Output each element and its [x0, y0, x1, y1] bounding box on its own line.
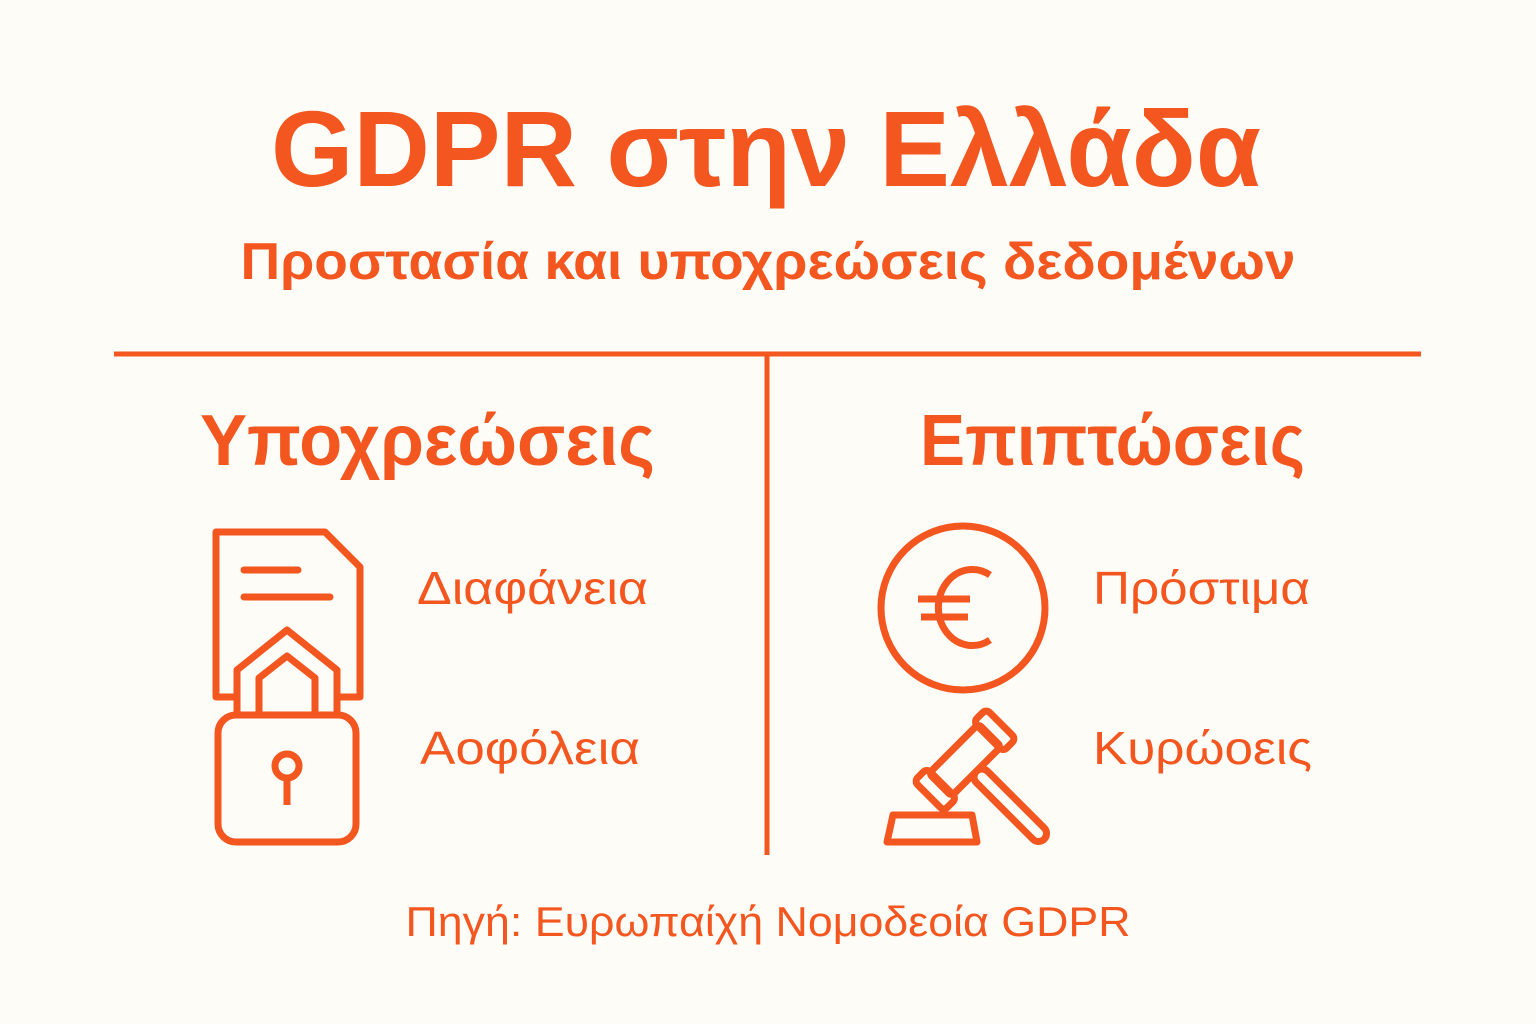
label: security: Αοφόλεια	[420, 722, 640, 774]
heading: consequences: Επιπτώσεις	[920, 401, 1305, 481]
icon: lock	[218, 630, 356, 842]
label: fines: Πρόστιμα	[1093, 562, 1310, 614]
title: GDPR στην Ελλάδα	[271, 88, 1261, 209]
icon: gavel	[887, 709, 1080, 875]
icon: euro coin	[881, 526, 1045, 690]
icon: document	[216, 532, 360, 697]
heading: obligations: Υποχρεώσεις	[200, 401, 655, 481]
label: transparency: Διαφάνεια	[417, 562, 648, 614]
footer source: Πηγή: Ευρωπαίχή Νομοδεοία GDPR	[406, 898, 1130, 945]
subtitle: Προστασία και υποχρεώσεις δεδομένων	[240, 233, 1296, 291]
label: sanctions: Κυρώοεις	[1093, 722, 1312, 774]
